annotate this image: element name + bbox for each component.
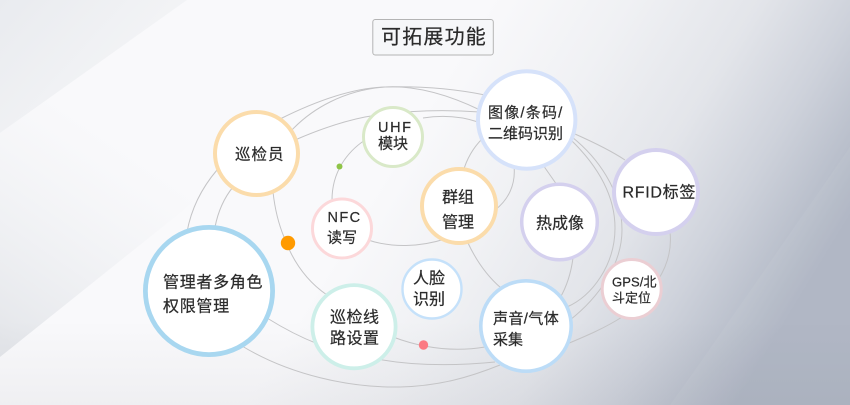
connecting lines network	[187, 87, 670, 387]
node: 声音/气体采集: 声音/气体	[493, 310, 559, 328]
node: GPS/北斗定位: 斗定位	[612, 290, 651, 306]
node: 群组管理: 管理	[442, 214, 474, 232]
node: RFID标签	[614, 150, 698, 234]
node: GPS/北斗定位	[602, 260, 661, 318]
dot: green	[336, 164, 342, 170]
node: 群组管理	[422, 169, 496, 243]
node: 声音/气体采集: 采集	[493, 332, 523, 348]
node: 图像/条码/二维码识别	[478, 71, 575, 169]
node: UHF模块	[364, 108, 422, 166]
node: 人脸识别: 识别	[413, 290, 445, 308]
node: 管理者多角色权限管理: 权限管理	[163, 298, 230, 316]
node: 图像/条码/二维码识别: 图像/条码/	[488, 104, 564, 122]
node: UHF模块: UHF	[378, 120, 413, 136]
node: NFC读写: 读写	[327, 230, 357, 246]
node: GPS/北斗定位: GPS/北	[612, 274, 657, 290]
node: 声音/气体采集	[481, 281, 571, 371]
node: 巡检线路设置: 路设置	[330, 330, 380, 348]
node: 人脸识别: 人脸	[413, 270, 445, 288]
title: 可拓展功能	[381, 26, 487, 48]
node: 热成像: 热成像	[536, 214, 584, 232]
dot: orange	[281, 236, 295, 250]
node: 管理者多角色权限管理: 管理者多角色	[163, 274, 263, 292]
node: UHF模块: 模块	[378, 136, 408, 152]
node: 群组管理: 群组	[442, 188, 474, 206]
node: 管理者多角色权限管理	[145, 227, 273, 355]
node: 图像/条码/二维码识别: 二维码识别	[488, 126, 563, 142]
node: 巡检员	[215, 112, 298, 195]
node: RFID标签: RFID标签	[622, 184, 696, 202]
node: NFC读写: NFC	[328, 210, 362, 226]
node: 巡检线路设置	[312, 285, 396, 368]
node: 巡检员: 巡检员	[235, 146, 285, 164]
node: 巡检线路设置: 巡检线	[330, 308, 380, 326]
node: 热成像	[522, 184, 597, 260]
dot: pink	[419, 340, 428, 350]
node: 人脸识别	[402, 260, 462, 318]
title	[373, 20, 493, 55]
node: NFC读写	[312, 199, 372, 258]
